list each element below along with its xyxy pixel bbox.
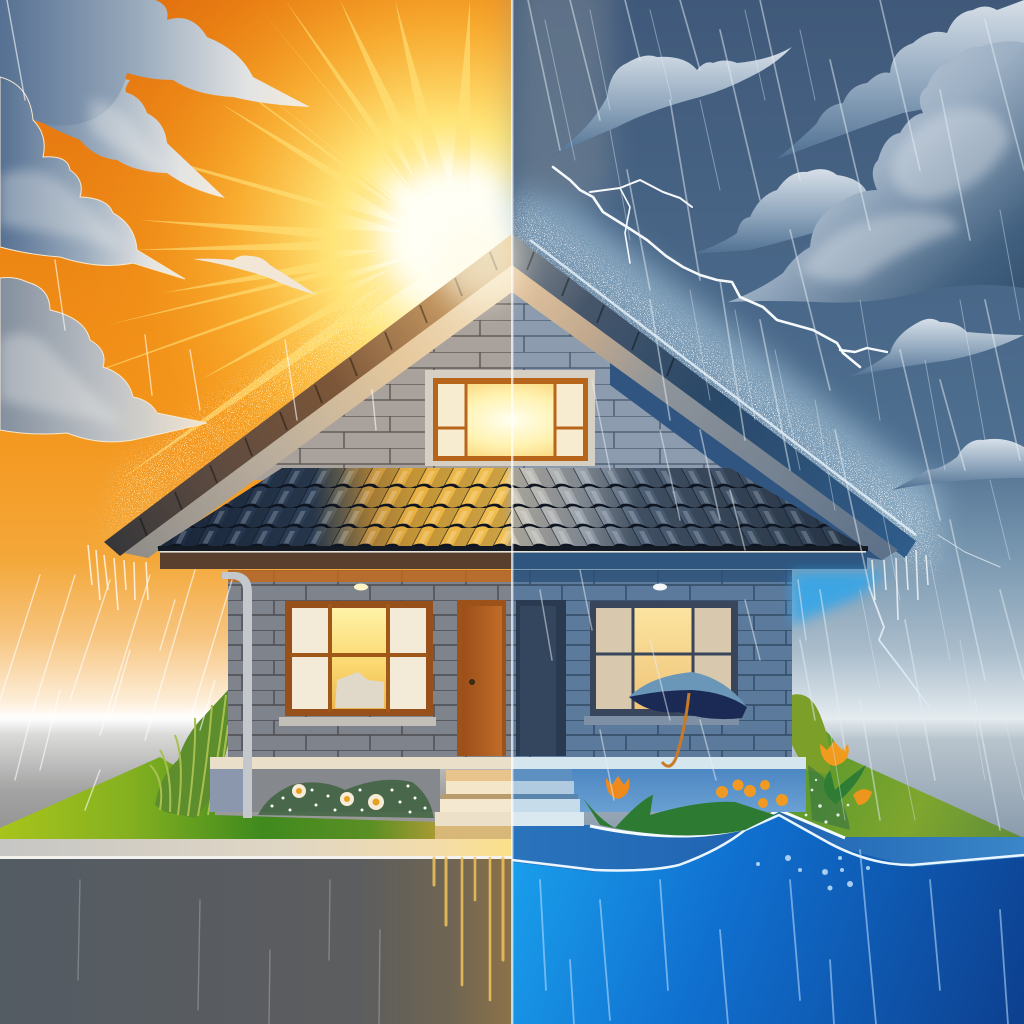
- right tulip small: [853, 789, 872, 805]
- fine rain right sky: [545, 10, 1024, 820]
- tall grass: [155, 690, 228, 818]
- gable trim left: [124, 265, 512, 558]
- left door: [457, 600, 506, 756]
- deep water: [512, 848, 1024, 1024]
- porch lamp right: [653, 584, 667, 590]
- ground: concrete on left: [0, 839, 512, 1024]
- cloud: top left: [0, 0, 310, 126]
- daisies flowerbed: [258, 780, 434, 818]
- left window: [279, 601, 436, 726]
- tile pattern right: [512, 468, 866, 548]
- roof ridge lines: [140, 252, 674, 536]
- cloud: lower right: [848, 319, 1024, 377]
- rain in water: [540, 850, 1008, 1024]
- bush: [792, 694, 830, 775]
- rain left sky: [0, 0, 376, 810]
- gable trim right: [512, 265, 898, 560]
- lawn on left: [0, 690, 437, 839]
- clouds over stormy sky: [550, 0, 1024, 490]
- left wall: [228, 570, 512, 758]
- cloud: third left: [0, 77, 185, 279]
- tulips flowerbed: [583, 741, 872, 835]
- gutter: [158, 546, 868, 551]
- water under crest: [679, 815, 912, 866]
- porch lamp left: [354, 584, 368, 590]
- tile pattern left: [157, 468, 512, 548]
- stormy sky panel: [512, 0, 1024, 860]
- gutter highlight: [160, 551, 866, 553]
- rain over house: [540, 380, 806, 800]
- handle: [662, 693, 689, 766]
- large tulip: [606, 776, 630, 799]
- lightning bolts: [553, 167, 1000, 708]
- crest upper foam: [590, 810, 845, 838]
- cloud: top center: [550, 47, 792, 157]
- right window: [584, 601, 739, 725]
- cushions: [335, 672, 384, 708]
- gable wall left: [240, 280, 512, 480]
- grass blades: [150, 695, 228, 816]
- leaves: [583, 795, 775, 835]
- yellow drips into concrete: [434, 858, 503, 1000]
- canopy top: [629, 672, 747, 707]
- cloud: center right: [692, 169, 867, 254]
- blue eave glow: [792, 572, 885, 625]
- soffit shade right: [610, 360, 882, 560]
- cloud highlights: [0, 100, 180, 425]
- ground: flood water on right: [512, 779, 1024, 1024]
- small tulips: [716, 780, 788, 808]
- splash: [808, 765, 850, 830]
- cloud: small wisp: [193, 256, 317, 295]
- right wall: [512, 570, 792, 758]
- cloud: far lower right: [892, 439, 1024, 490]
- cloud: lower left: [0, 278, 207, 442]
- gable wall right: [512, 280, 790, 490]
- sun glow over apex: [436, 220, 520, 304]
- plinth right: [568, 768, 806, 812]
- under-eave shade right: [512, 570, 792, 582]
- surface layer: [512, 812, 1024, 872]
- cloud: upper right: [777, 0, 1024, 159]
- gable roof right: [512, 234, 916, 558]
- gable roof left: [104, 234, 512, 556]
- lawn on right: [760, 694, 1024, 860]
- sunny sky panel: [0, 0, 524, 860]
- bubbles: [756, 855, 870, 890]
- fascia right: [512, 552, 867, 569]
- water drips at eaves: [88, 545, 928, 620]
- rain on concrete: [78, 880, 380, 1024]
- cloud large highlights: [800, 108, 1010, 281]
- fascia left: [160, 552, 512, 569]
- central dividing line: [511, 0, 513, 1024]
- right tulip big: [820, 741, 849, 766]
- steps right: [512, 769, 584, 826]
- plinth end left: [210, 768, 245, 812]
- umbrella: [629, 672, 747, 766]
- clouds over sunny sky: [0, 0, 317, 442]
- under-eave glow left: [228, 570, 512, 582]
- wave crest foam: [512, 815, 1024, 870]
- right tulip leaves: [824, 765, 866, 804]
- rain right sky: [528, 0, 1024, 830]
- upper window: [425, 370, 595, 466]
- downpipe: [222, 572, 252, 818]
- cloud: second left: [0, 60, 225, 198]
- right door: [516, 600, 566, 756]
- spray: [757, 779, 849, 824]
- speckled mist along the roof: [105, 195, 935, 580]
- cloud: large right: [728, 41, 1024, 303]
- porch top right: [512, 757, 806, 769]
- wet highlight along right roof: [530, 240, 916, 535]
- steps left: [435, 770, 512, 839]
- plinth left: [210, 768, 440, 812]
- porch top left: [210, 757, 512, 769]
- house: [104, 234, 916, 839]
- tiled lower roof: [157, 468, 866, 548]
- canopy underside: [629, 690, 747, 719]
